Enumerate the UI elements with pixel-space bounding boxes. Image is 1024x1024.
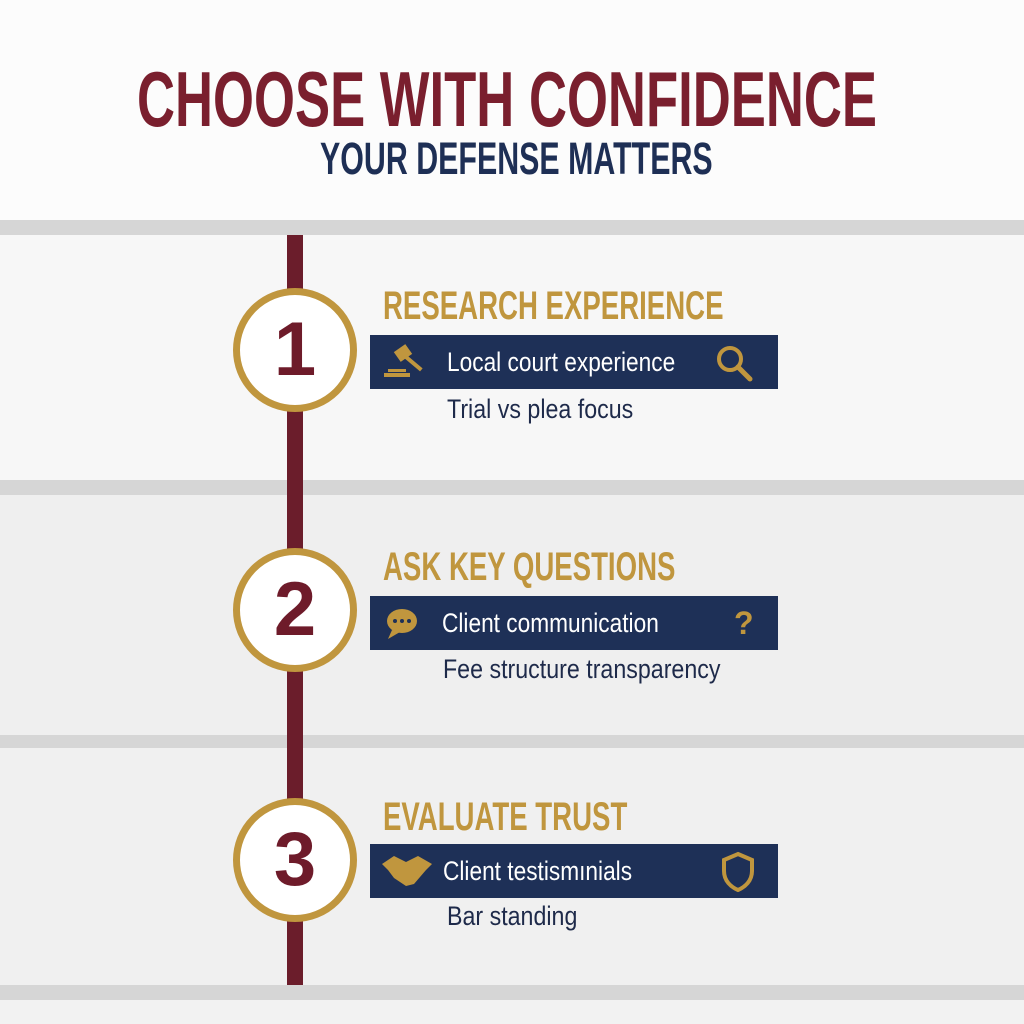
bar 1 xyxy=(370,335,778,389)
bar 2 xyxy=(370,596,778,650)
subtext 2: Fee structure transparency xyxy=(443,654,720,684)
bar 2: Client communication xyxy=(442,608,659,638)
icon: gavel xyxy=(384,344,422,377)
timeline line xyxy=(287,235,303,985)
circle 2: 2 xyxy=(274,567,316,652)
bar 3: Client testismınials xyxy=(443,856,632,886)
title: CHOOSE WITH CONFIDENCE xyxy=(137,55,877,143)
circle 2 xyxy=(233,548,357,672)
circle 3: 3 xyxy=(274,817,316,902)
icon: question mark: ? xyxy=(734,605,754,641)
subtext 3: Bar standing xyxy=(447,901,577,931)
bar 1: Local court experience xyxy=(447,347,675,377)
icon: speech bubble xyxy=(387,609,417,639)
heading 1: RESEARCH EXPERIENCE xyxy=(383,284,723,328)
circle 1 xyxy=(233,288,357,412)
heading 2: ASK KEY QUESTIONS xyxy=(383,545,675,589)
circle 1: 1 xyxy=(274,307,316,392)
heading 3: EVALUATE TRUST xyxy=(383,795,627,839)
subtext 1: Trial vs plea focus xyxy=(447,394,633,424)
header background xyxy=(0,0,1024,220)
icon: handshake xyxy=(382,856,432,886)
circle 3 xyxy=(233,798,357,922)
icon: magnifier xyxy=(717,346,752,382)
icon: shield xyxy=(722,852,754,892)
subtitle: YOUR DEFENSE MATTERS xyxy=(320,133,713,184)
bar 3 xyxy=(370,844,778,898)
